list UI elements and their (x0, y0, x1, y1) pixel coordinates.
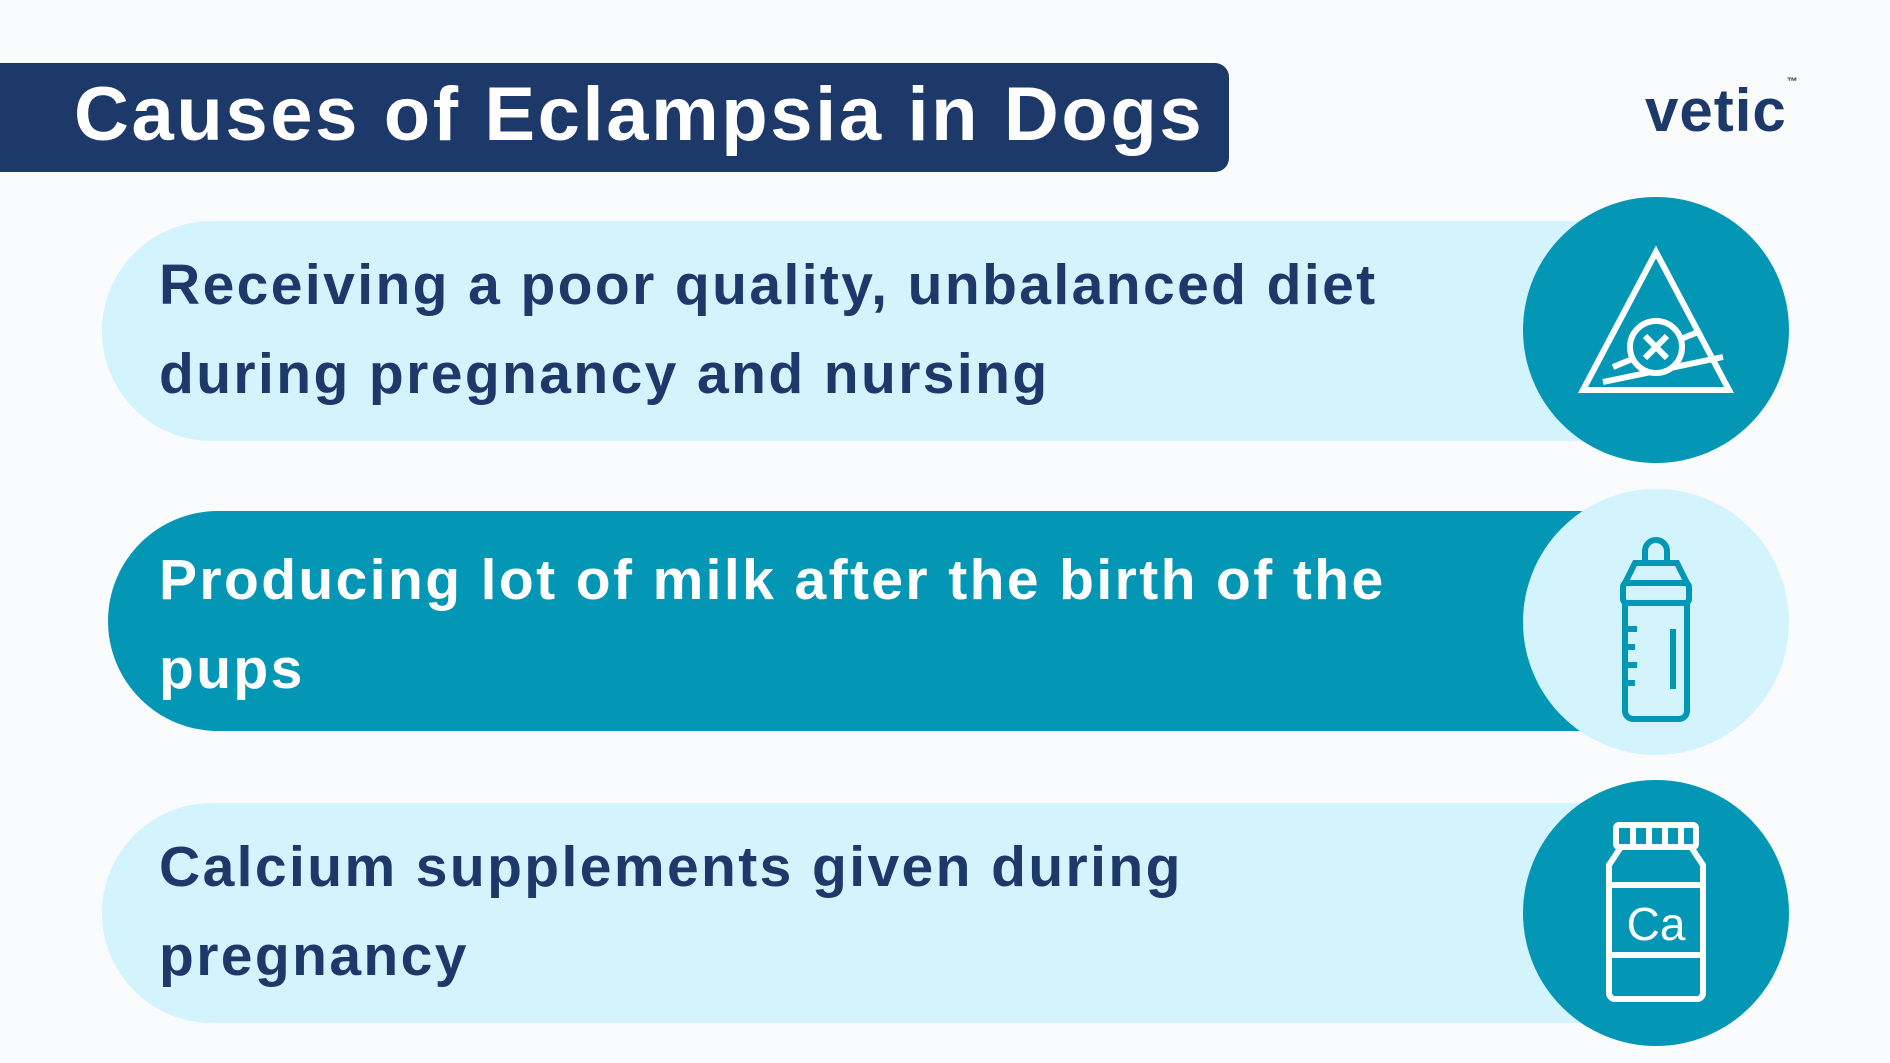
icon: calcium jar: Ca (1627, 898, 1686, 950)
panel: poor diet: during pregnancy and nursing (159, 342, 1050, 406)
icon: food pyramid (1523, 197, 1789, 463)
panel: milk: Producing lot of milk after the birth of the (159, 548, 1386, 612)
logo: vetic™ (1645, 76, 1799, 144)
panel: calcium (102, 803, 1662, 1023)
panel: calcium: Calcium supplements given during (159, 835, 1183, 899)
icon: calcium jar (1523, 780, 1789, 1046)
panel: calcium: pregnancy (159, 924, 469, 988)
icon: baby bottle (1523, 489, 1789, 755)
panel: milk (108, 511, 1668, 731)
panel: milk: pups (159, 637, 305, 701)
panel: poor diet: Receiving a poor quality, unbalanced diet (159, 253, 1378, 317)
panel: poor diet (102, 221, 1662, 441)
title: Causes of Eclampsia in Dogs (74, 72, 1204, 157)
